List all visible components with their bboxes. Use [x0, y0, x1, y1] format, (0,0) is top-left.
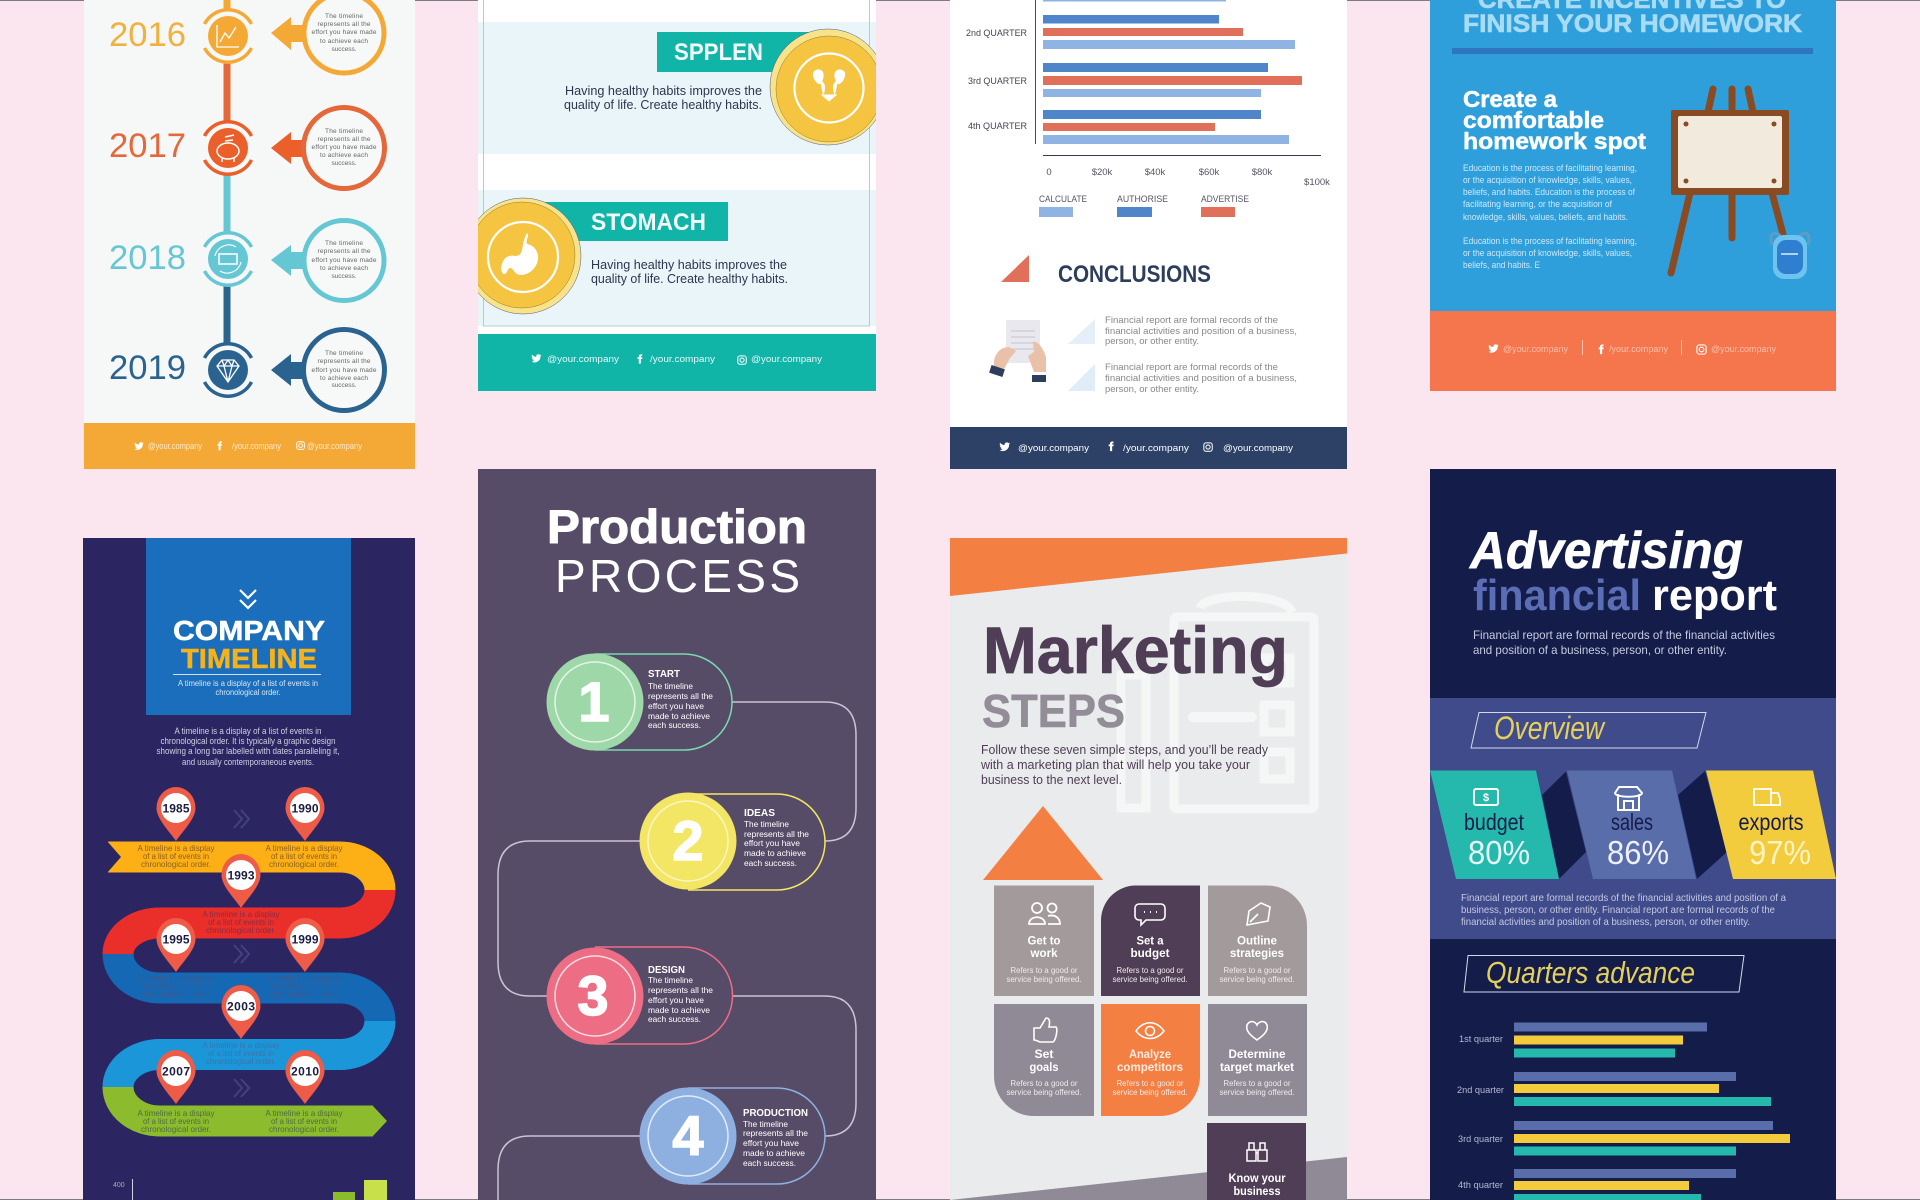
card: set a budget: Set a	[1136, 936, 1164, 948]
year 2017 row: represents all the	[318, 136, 371, 143]
bar chart: quarters: 3rd quarter	[1458, 1134, 1503, 1145]
year 2017 row: The timeline	[325, 128, 363, 135]
step 3: design: DESIGN	[648, 965, 685, 976]
heading: homework spot: Create a	[1463, 86, 1557, 112]
card: outline strategies: Refers to a good or	[1224, 966, 1291, 975]
step 2: ideas: represents all the	[744, 829, 809, 839]
card: get to work: Get to	[1028, 936, 1060, 948]
bar chart: quarters	[1457, 1022, 1790, 1200]
year pins: 2010	[291, 1064, 319, 1078]
intro text: A timeline is a display of a list of events in	[174, 726, 322, 736]
ribbon captions: chronological order.	[206, 925, 276, 935]
step 1: start: The timeline	[648, 681, 693, 691]
year 2018 row: to achieve each	[320, 265, 368, 272]
step 3: design: represents all the	[648, 985, 713, 995]
card: outline strategies: strategies	[1230, 948, 1284, 960]
year 2016 row	[109, 0, 384, 73]
spleen section: SPPLEN	[674, 39, 763, 66]
bar chart: 4th QUARTER	[968, 121, 1027, 131]
year pins: 1995	[162, 932, 190, 946]
subtitle: and position of a business, person, or other entity.	[1473, 643, 1727, 657]
card: set goals: goals	[1030, 1062, 1058, 1074]
conclusion text two	[1068, 362, 1297, 395]
step 4: production: made to achieve	[743, 1148, 805, 1158]
body text: Education is the process of facilitating learning,	[1463, 236, 1637, 247]
bar chart: $80k	[1252, 167, 1273, 178]
stat card: exports: 97%	[1749, 834, 1811, 871]
conclusion text two: financial activities and position of a business,	[1105, 373, 1297, 384]
step 2: ideas: effort you have	[744, 838, 800, 848]
year 2016 row: represents all the	[318, 21, 371, 28]
year 2017 row: 2017	[109, 127, 186, 165]
card: know your business: Know your	[1228, 1173, 1286, 1185]
card: determine target market: service being offered.	[1220, 1088, 1294, 1097]
intro text	[980, 743, 1269, 787]
heading: homework spot	[1463, 86, 1646, 154]
timeline spine	[224, 0, 230, 345]
lower bar chart fragment: 400	[113, 1182, 125, 1189]
year 2018 row	[109, 220, 384, 300]
stat card: sales	[1567, 770, 1727, 879]
ribbon captions: A timeline is a display	[138, 843, 215, 853]
conclusion text two: person, or other entity.	[1105, 384, 1199, 395]
card: set a budget: service being offered.	[1112, 975, 1188, 984]
year pins: 2003	[227, 1000, 255, 1014]
card: set a budget: budget	[1130, 948, 1170, 960]
step 4: production: The timeline	[743, 1119, 788, 1129]
step 3: design: effort you have	[648, 995, 704, 1005]
card: get to work: service being offered.	[1006, 975, 1082, 984]
connector lines	[498, 702, 856, 1200]
step 4: production: PRODUCTION	[743, 1108, 808, 1119]
decorative chevrons row	[234, 810, 249, 1097]
title: Production	[547, 500, 807, 553]
icon: backpack	[1771, 233, 1809, 279]
heading: overview: Overview	[1494, 710, 1606, 746]
overview paragraph: Financial report are formal records of the financial activities and position of a	[1461, 892, 1786, 904]
footer: coral social bar: @your.company	[1711, 344, 1776, 354]
conclusions heading: CONCLUSIONS	[1058, 261, 1211, 288]
card: determine target market: Determine	[1228, 1049, 1286, 1061]
ribbon captions: A timeline is a display	[138, 1108, 215, 1118]
chart legend: ADVERTISE	[1201, 194, 1249, 204]
footer: navy social bar	[950, 427, 1347, 469]
body text: beliefs, and habits. Education is the process of	[1463, 187, 1635, 198]
card: set goals	[994, 1004, 1094, 1116]
stat card: budget: 80%	[1468, 834, 1530, 871]
body text: facilitating learning, or the acquisition of	[1463, 199, 1612, 210]
card: get to work	[994, 886, 1094, 996]
intro text: and usually contemporaneous events.	[182, 757, 314, 767]
panel: yearly timeline 2016-2019	[84, 0, 415, 469]
subtitle	[1473, 628, 1775, 657]
year 2017 row	[109, 108, 384, 188]
bar chart: $60k	[1199, 167, 1220, 178]
year 2019 row: 2019	[109, 349, 186, 387]
intro text: Follow these seven simple steps, and you’ll be ready	[981, 743, 1269, 757]
bar chart: 2nd QUARTER	[966, 28, 1027, 38]
year pins: 1985	[162, 802, 190, 816]
ribbon captions: of a list of events in	[208, 1048, 274, 1058]
step 2: ideas	[640, 792, 825, 890]
year 2019 row: effort you have made	[312, 367, 377, 374]
stat card: exports	[1706, 770, 1836, 879]
ribbon captions: of a list of events in	[271, 851, 337, 861]
year pins	[156, 787, 324, 1104]
stat card: budget: $	[1483, 792, 1489, 804]
card: get to work: Refers to a good or	[1010, 966, 1078, 975]
conclusion text two: Financial report are formal records of the	[1105, 362, 1278, 373]
bar chart: quarters: 2nd quarter	[1457, 1085, 1504, 1096]
step 3: design: made to achieve	[648, 1005, 710, 1015]
step 4: production: 4	[672, 1104, 704, 1167]
panel: production process	[478, 469, 876, 1200]
title: STEPS	[982, 685, 1125, 737]
bar chart: quarters: 1st quarter	[1459, 1034, 1503, 1045]
card: determine target market	[1208, 1004, 1307, 1116]
footer: teal social bar: @your.company	[547, 354, 620, 364]
step 1: start: made to achieve	[648, 711, 710, 721]
stomach section: STOMACH	[591, 209, 706, 236]
ribbon captions: A timeline is a display	[202, 909, 280, 919]
winding ribbon	[107, 841, 387, 1137]
year 2016 row: effort you have made	[312, 29, 377, 36]
ribbon captions: chronological order.	[269, 1124, 339, 1134]
header block: chronological order.	[216, 688, 280, 697]
ribbon captions: chronological order.	[141, 859, 211, 869]
intro text: business to the next level.	[981, 773, 1122, 787]
header block: A timeline is a display of a list of events in	[178, 679, 318, 688]
step 2: ideas: 2	[672, 809, 704, 872]
year 2018 row: represents all the	[318, 248, 371, 255]
title: Advertising	[1468, 522, 1743, 580]
conclusion text one: financial activities and position of a business,	[1105, 326, 1297, 337]
lower bar chart fragment	[113, 1179, 387, 1200]
step 3: design: The timeline	[648, 975, 693, 985]
stat card: budget: budget	[1464, 809, 1525, 835]
card: outline strategies: service being offered.	[1220, 975, 1294, 984]
bar chart: 3rd QUARTER	[968, 76, 1027, 86]
footer: orange social bar	[84, 423, 415, 469]
stomach section: quality of life. Create healthy habits.	[591, 272, 788, 286]
title	[982, 613, 1288, 737]
footer: navy social bar: /your.company	[1123, 443, 1190, 453]
overview paragraph	[1461, 892, 1786, 928]
step 3: design: 3	[577, 964, 609, 1027]
footer: teal social bar: /your.company	[650, 354, 716, 364]
year 2019 row	[109, 330, 384, 410]
title	[550, 508, 804, 592]
step 2: ideas: each success.	[744, 858, 797, 868]
card: determine target market: Refers to a good or	[1224, 1079, 1291, 1088]
year 2017 row: success.	[332, 160, 357, 167]
footer: coral social bar: /your.company	[1609, 344, 1669, 354]
overview paragraph: financial activities and position of a business, person, or other entity.	[1461, 916, 1750, 928]
conclusion text one	[1068, 315, 1297, 347]
chart legend: AUTHORISE	[1117, 194, 1168, 204]
year 2019 row: to achieve each	[320, 375, 368, 382]
ribbon captions: of a list of events in	[143, 851, 209, 861]
year 2019 row: The timeline	[325, 350, 363, 357]
panel: advertising financial report	[1430, 469, 1836, 1200]
bar chart: $20k	[1092, 167, 1113, 178]
body text: knowledge, skills, values, beliefs, and habits.	[1463, 212, 1628, 223]
year 2018 row: 2018	[109, 239, 186, 277]
card: set a budget: Refers to a good or	[1116, 966, 1184, 975]
step 4: production: each success.	[743, 1158, 796, 1168]
heading: overview	[1471, 710, 1706, 748]
heading: homework spot: homework spot	[1463, 128, 1646, 154]
card: set goals: Set	[1034, 1049, 1054, 1061]
step 4: production	[640, 1088, 825, 1184]
step 1: start	[546, 654, 732, 750]
bar chart: 0	[1046, 167, 1052, 178]
card: outline strategies	[1208, 886, 1307, 996]
card: analyze competitors: competitors	[1117, 1062, 1183, 1074]
icon: easel	[1671, 89, 1789, 273]
ribbon captions: chronological order.	[141, 1124, 211, 1134]
title: report	[1652, 571, 1777, 620]
title: PROCESS	[555, 550, 800, 602]
step 2: ideas: The timeline	[744, 819, 789, 829]
bar chart	[966, 0, 1330, 188]
ribbon captions: of a list of events in	[143, 981, 209, 991]
panel: quarterly bar chart and conclusions	[950, 0, 1347, 469]
body text: Education is the process of facilitating learning,	[1463, 163, 1637, 174]
year pins: 2007	[162, 1064, 190, 1078]
overview paragraph: business, person, or other entity. Financial report are formal records of the	[1461, 904, 1775, 916]
card: analyze competitors: Analyze	[1129, 1049, 1171, 1061]
stat card: sales: 86%	[1607, 834, 1669, 871]
panel: company timeline	[83, 538, 415, 1200]
card: get to work: work	[1029, 948, 1058, 960]
year 2019 row: represents all the	[318, 358, 371, 365]
ribbon captions: chronological order.	[141, 989, 211, 999]
ribbon captions: of a list of events in	[271, 981, 337, 991]
subtitle: Financial report are formal records of the financial activities	[1473, 628, 1775, 642]
icon: orange roof triangle	[983, 806, 1103, 880]
intro text: showing a long bar labelled with dates paralleling it,	[156, 746, 340, 756]
card: know your business	[1207, 1123, 1306, 1200]
footer: orange social bar: @your.company	[148, 441, 202, 451]
title	[1468, 522, 1777, 620]
ribbon captions: A timeline is a display	[266, 973, 343, 983]
ribbon captions: A timeline is a display	[138, 973, 215, 983]
footer: orange social bar: @your.company	[307, 441, 362, 451]
spleen section	[564, 29, 886, 145]
bar chart: $40k	[1145, 167, 1166, 178]
card: outline strategies: Outline	[1237, 936, 1277, 948]
year 2016 row: to achieve each	[320, 38, 368, 45]
intro text	[156, 726, 340, 767]
bar chart: quarters: 4th quarter	[1458, 1180, 1503, 1191]
year 2017 row: effort you have made	[312, 144, 377, 151]
intro text: with a marketing plan that will help you take your	[980, 758, 1250, 772]
footer: teal social bar: @your.company	[751, 354, 823, 364]
ribbon captions: A timeline is a display	[202, 1040, 280, 1050]
year pins: 1990	[292, 802, 319, 816]
card: set goals: service being offered.	[1006, 1088, 1082, 1097]
chart legend	[1039, 194, 1249, 217]
title: financial	[1473, 571, 1641, 620]
card: set goals: Refers to a good or	[1010, 1079, 1078, 1088]
header block: COMPANY	[173, 615, 325, 646]
body text: or the acquisition of knowledge, skills, values,	[1463, 175, 1632, 186]
panel: organ health habits	[465, 0, 886, 391]
title: FINISH YOUR HOMEWORK	[1463, 10, 1802, 38]
conclusion text one: person, or other entity.	[1105, 336, 1199, 347]
ribbon captions: chronological order.	[206, 1056, 276, 1066]
year pins: 1993	[228, 868, 255, 882]
ribbon captions	[138, 843, 343, 1134]
step 1: start: effort you have	[648, 701, 704, 711]
step 1: start: START	[648, 669, 680, 680]
spleen section: Having healthy habits improves the	[565, 84, 762, 98]
step 4: production: effort you have	[743, 1138, 799, 1148]
conclusion text one: Financial report are formal records of the	[1105, 315, 1278, 326]
ribbon captions: chronological order.	[269, 859, 339, 869]
ribbon captions: A timeline is a display	[266, 1108, 343, 1118]
intro text: chronological order. It is typically a graphic design	[160, 736, 336, 746]
title: Marketing	[983, 613, 1288, 687]
footer: coral social bar: @your.company	[1503, 344, 1568, 354]
footer: navy social bar: @your.company	[1018, 443, 1090, 453]
spleen section: quality of life. Create healthy habits.	[564, 98, 762, 112]
ribbon captions: of a list of events in	[208, 917, 274, 927]
card: set a budget	[1101, 886, 1200, 996]
year 2016 row: The timeline	[325, 13, 363, 20]
icon: hands holding document	[989, 320, 1046, 382]
step 3: design	[546, 947, 732, 1044]
step 1: start: 1	[578, 670, 610, 733]
step 1: start: each success.	[648, 720, 701, 730]
header block: TIMELINE	[181, 643, 317, 674]
card: analyze competitors: service being offered.	[1112, 1088, 1188, 1097]
ribbon captions: chronological order.	[269, 989, 339, 999]
year 2016 row: success.	[332, 46, 357, 53]
body text	[1463, 163, 1637, 271]
ribbon captions: of a list of events in	[271, 1116, 337, 1126]
conclusions heading	[1001, 255, 1211, 288]
panel: homework incentives	[1430, 0, 1836, 391]
year 2019 row: success.	[332, 382, 357, 389]
stat card: sales: sales	[1611, 809, 1653, 835]
card: analyze competitors	[1101, 1004, 1200, 1116]
step 2: ideas: IDEAS	[744, 808, 775, 819]
heading: homework spot: comfortable	[1463, 107, 1604, 133]
year 2018 row: success.	[332, 273, 357, 280]
header block	[146, 538, 351, 715]
step 3: design: each success.	[648, 1014, 701, 1024]
body text: beliefs, and habits. E	[1463, 260, 1540, 271]
card: determine target market: target market	[1220, 1062, 1294, 1074]
stat card: budget	[1430, 770, 1586, 879]
body text: or the acquisition of knowledge, skills, values,	[1463, 248, 1632, 259]
footer: navy social bar: @your.company	[1223, 443, 1294, 453]
year 2017 row: to achieve each	[320, 152, 368, 159]
card: analyze competitors: Refers to a good or	[1116, 1079, 1184, 1088]
step 4: production: represents all the	[743, 1128, 808, 1138]
heading: quarters advance: Quarters advance	[1486, 955, 1695, 990]
stat card: exports: exports	[1738, 809, 1804, 835]
icon: background clipboard	[1121, 596, 1314, 809]
card: know your business: business	[1234, 1186, 1280, 1198]
step 1: start: represents all the	[648, 691, 713, 701]
year pins: 1999	[292, 932, 319, 946]
footer: orange social bar: /your.company	[232, 441, 281, 451]
title	[1452, 0, 1813, 54]
ribbon captions: of a list of events in	[143, 1116, 209, 1126]
ribbon captions: A timeline is a display	[266, 843, 343, 853]
stomach section	[465, 198, 788, 314]
bar chart: $100k	[1304, 177, 1330, 188]
stomach section: Having healthy habits improves the	[591, 258, 787, 272]
footer: coral social bar	[1430, 311, 1836, 391]
panel: marketing steps	[950, 538, 1347, 1200]
year 2016 row: 2016	[109, 16, 186, 54]
step 2: ideas: made to achieve	[744, 848, 806, 858]
footer: teal social bar	[478, 334, 876, 391]
chart legend: CALCULATE	[1039, 194, 1087, 204]
year 2018 row: The timeline	[325, 240, 363, 247]
year 2018 row: effort you have made	[312, 257, 377, 264]
